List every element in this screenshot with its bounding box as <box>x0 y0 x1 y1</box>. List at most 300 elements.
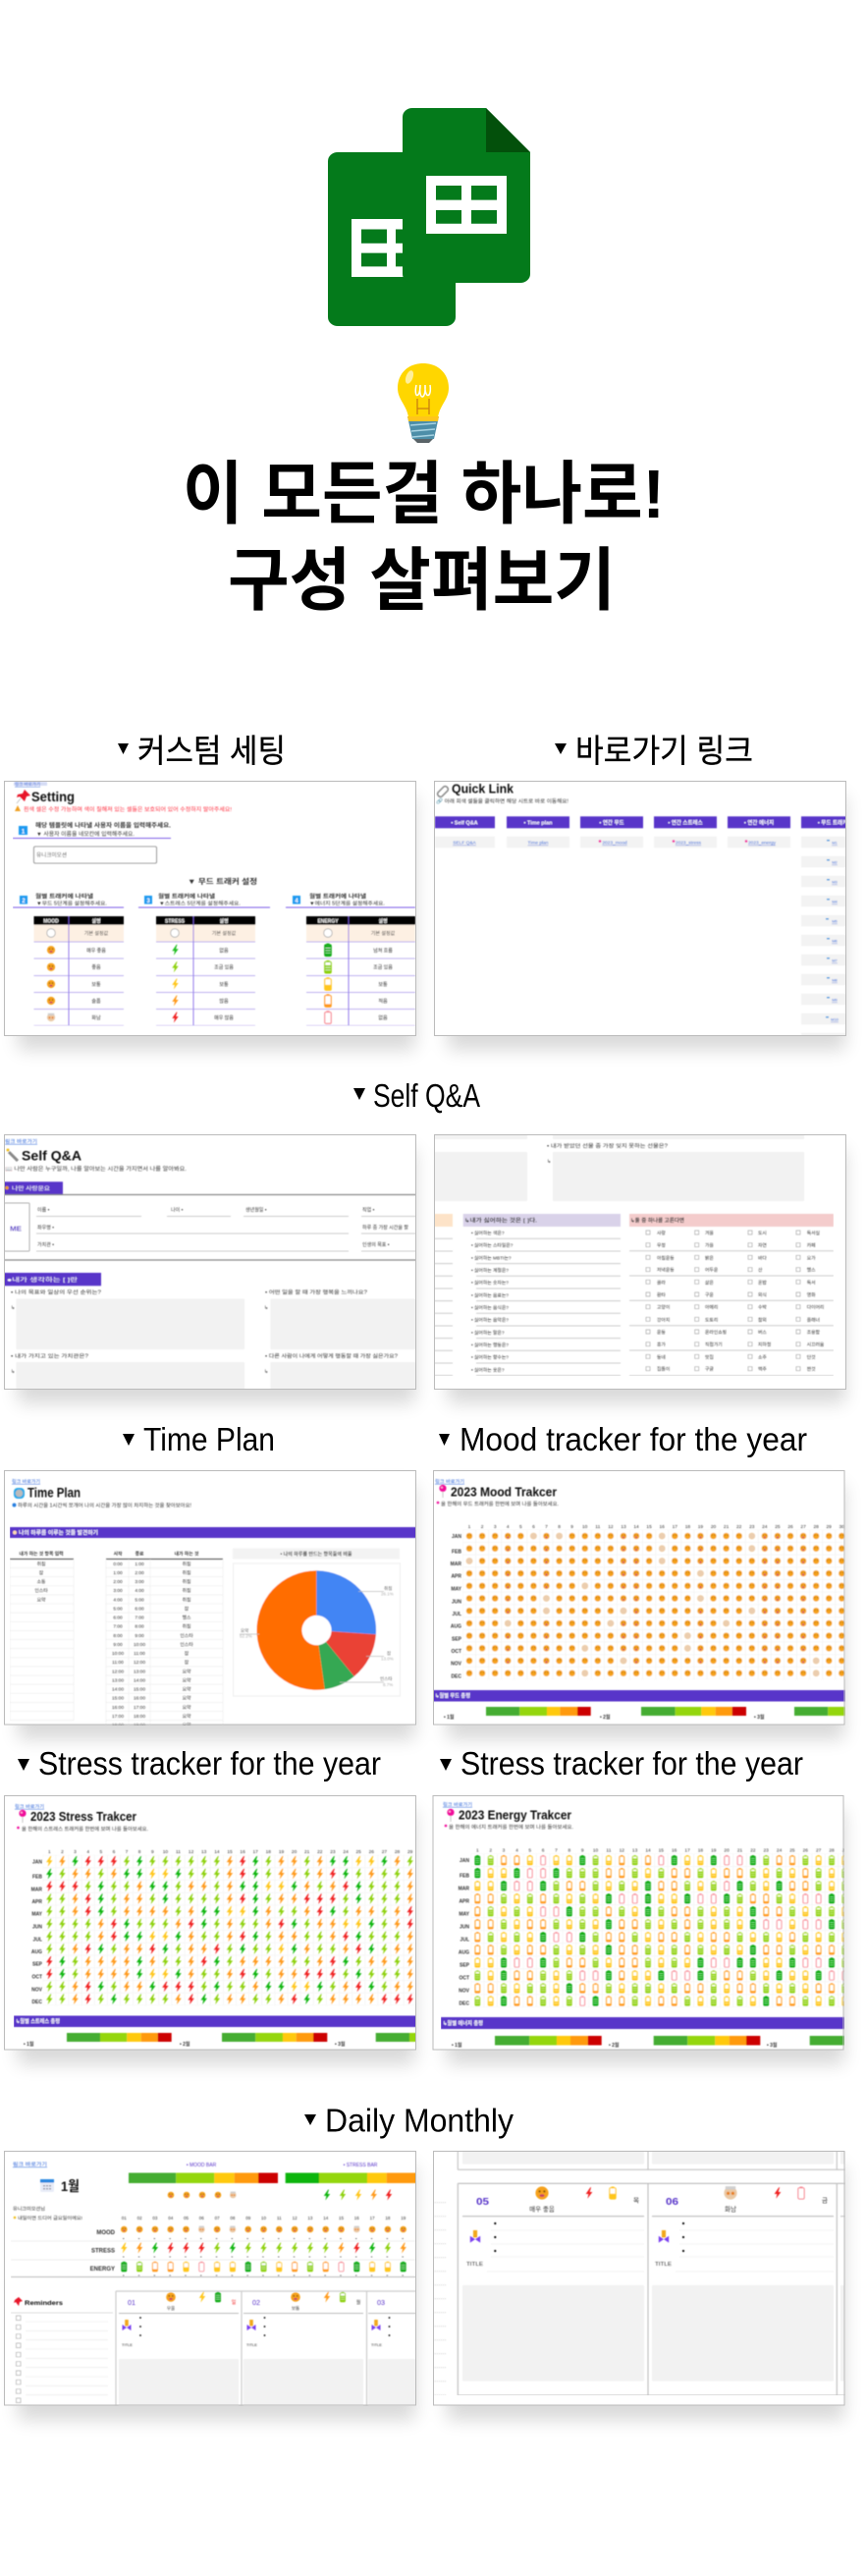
either-or table: 수박 <box>758 1304 767 1311</box>
day card 01: 우울 <box>167 2306 175 2312</box>
either-or table: 동네 <box>657 1353 666 1360</box>
day numbers: 9 <box>570 1524 573 1530</box>
monthly mini tracker: 15 <box>339 2216 344 2220</box>
item input table <box>10 1550 74 1721</box>
monthly mini tracker: 14 <box>323 2216 329 2220</box>
upper card remnants <box>433 2151 845 2395</box>
link cells: SELF Q&A <box>453 841 477 847</box>
link cells <box>435 837 850 1044</box>
day numbers: 14 <box>645 1848 651 1854</box>
panel: daily monthly sheet right <box>433 2151 845 2405</box>
panel: daily monthly sheet left <box>4 2151 417 2406</box>
schedule table: 13:00 <box>134 1669 145 1674</box>
either-or table: 밝은 <box>705 1254 714 1261</box>
link cells: M9 <box>832 998 839 1002</box>
energy tracker title: 2023 Energy Trakcer <box>459 1808 571 1822</box>
user name section <box>13 821 171 863</box>
day numbers: 18 <box>266 1849 271 1855</box>
either-or table: 독서실 <box>807 1230 820 1236</box>
profile fields: 이름 • <box>37 1207 50 1214</box>
monthly mood summary: • 3월 <box>754 1714 765 1721</box>
day numbers: 23 <box>330 1849 336 1855</box>
month title: 내일이면 드디어 금요일이에요! <box>18 2215 82 2221</box>
link cells: Time plan <box>528 841 549 847</box>
day numbers: 19 <box>279 1849 284 1855</box>
heading: self q&a: Self Q&A <box>373 1077 480 1114</box>
monthly stress summary <box>14 2015 416 2048</box>
section 3 stress: 월별 트래커에 나타낼 <box>158 892 215 900</box>
stress level table <box>156 916 255 1025</box>
month labels: MAR <box>31 1887 42 1892</box>
energy level table <box>306 916 415 1025</box>
either-or table: 구운 <box>705 1292 714 1298</box>
link cells: M1 <box>832 841 839 845</box>
section 2 mood <box>13 892 124 907</box>
item input table: 내가 하는 것 항목 입력 <box>19 1550 64 1558</box>
month labels: AUG <box>31 1949 42 1955</box>
day numbers: 23 <box>764 1848 769 1854</box>
month labels: APR <box>451 1574 461 1580</box>
section 2 mood: 2 <box>22 899 26 904</box>
day numbers: 24 <box>777 1848 783 1854</box>
month labels: OCT <box>451 1649 461 1655</box>
mood tracker title: 2023 Mood Trakcer <box>451 1485 557 1499</box>
either-or table: 도시 <box>758 1231 767 1236</box>
dislike list: • 싫어하는 향수는? <box>471 1354 509 1361</box>
user name section: 유니크미모션 <box>36 850 67 858</box>
either-or table: 사랑 <box>657 1230 666 1236</box>
month labels: MAY <box>459 1911 470 1917</box>
schedule table: 헬스 <box>183 1615 191 1620</box>
user name section: 1 <box>22 829 26 835</box>
month labels: JUL <box>453 1612 461 1617</box>
month labels: FEB <box>32 1875 42 1881</box>
section 3 stress: ▼스트레스 5단계를 설정해주세요. <box>159 900 241 907</box>
either-or table: 버스 <box>758 1329 767 1336</box>
day numbers: 29 <box>842 1848 847 1854</box>
self q&a title: 📖 나만 사람은 누구일까, 나를 알아보는 시간을 가지면서 나를 알아봐요. <box>5 1165 188 1173</box>
mood tracker setting heading: ▼ 무드 트래커 설정 <box>188 876 257 886</box>
month labels: APR <box>31 1899 42 1905</box>
panel: self q&a sheet left <box>4 1135 418 1392</box>
schedule table: 1:00 <box>135 1562 144 1567</box>
day numbers: 5 <box>99 1849 102 1855</box>
stress level table: 매우 많음 <box>214 1014 234 1021</box>
gift question: ↳ <box>547 1159 551 1165</box>
day card 06: 화남 <box>725 2204 736 2214</box>
month labels: MAR <box>451 1562 461 1567</box>
energy tracker title <box>443 1801 573 1831</box>
monthly mini tracker: 07 <box>215 2216 220 2220</box>
stress level table: 조금 있음 <box>214 964 234 971</box>
day numbers: 11 <box>176 1849 181 1855</box>
pie chart: 요약 <box>241 1627 248 1634</box>
panel: time plan sheet <box>4 1471 416 1728</box>
section 4 energy: 월별 트래커에 나타낼 <box>309 892 366 900</box>
schedule table: 10:00 <box>134 1642 145 1648</box>
either-or table: 우정 <box>657 1242 666 1249</box>
purple link buttons: • 연간 무드 <box>599 819 624 827</box>
monthly mini tracker: 06 <box>199 2216 204 2220</box>
day numbers: 13 <box>201 1849 207 1855</box>
monthly mini tracker: 17 <box>370 2216 375 2220</box>
day numbers: 12 <box>608 1524 614 1530</box>
time plan title: 하루의 시간을 1시간씩 쪼개어 나의 시간을 가장 많이 차지하는 것을 찾아보아요! <box>18 1501 191 1508</box>
day numbers: 25 <box>356 1849 361 1855</box>
day card 02: TITLE <box>246 2342 257 2347</box>
schedule table: 14:00 <box>134 1677 145 1683</box>
link cells: 2023_mood <box>602 841 627 847</box>
stress tracker title: 2023 Stress Trakcer <box>30 1810 136 1824</box>
month labels: FEB <box>460 1873 469 1879</box>
profile fields: 가치관 • <box>37 1241 54 1248</box>
mood level table: 화남 <box>91 1014 101 1021</box>
item input table: 취침 <box>37 1561 45 1567</box>
day numbers: 11 <box>595 1524 601 1530</box>
item input table: 소통 <box>37 1579 46 1585</box>
day card 02: 월 <box>356 2299 361 2306</box>
energy level table: 보통 <box>378 982 388 988</box>
mood level table: 보통 <box>91 982 101 988</box>
month title <box>13 2161 82 2221</box>
mood tracker title: 올 한해의 무드 트래커를 한번에 보며 나를 돌아보세요. <box>441 1501 559 1507</box>
profile fields: 직업 • <box>362 1207 375 1214</box>
monthly stress summary: ↳월별 스트레스 총평 <box>16 2017 60 2025</box>
schedule table: 요약 <box>183 1695 191 1702</box>
panel: setting sheet <box>4 781 416 1035</box>
setting title: 흰색 셀은 수정 가능하며 색이 칠해져 있는 셀들은 보호되어 있어 수정하지 말아주세요! <box>24 805 232 813</box>
title: 이 모든걸 하나로! <box>183 456 665 532</box>
monthly mood summary: ↳월별 무드 총평 <box>435 1691 470 1699</box>
schedule table: 취침 <box>183 1596 190 1603</box>
dislike list: • 싫어하는 MBTI는? <box>471 1254 512 1261</box>
day numbers: 8 <box>138 1849 141 1855</box>
either-or table: 자연 <box>758 1242 767 1249</box>
day numbers: 10 <box>593 1848 598 1854</box>
either-or table: 카페 <box>807 1242 816 1249</box>
icon: google sheets documents <box>328 108 530 326</box>
day numbers: 16 <box>660 1524 665 1530</box>
dislike list: • 싫어하는 색은? <box>471 1230 505 1236</box>
dislike list: ↳내가 싫어하는 것은 [ ]다. <box>464 1216 538 1224</box>
day numbers: 21 <box>737 1848 742 1854</box>
monthly mood summary <box>433 1690 845 1721</box>
section 2 mood: 월별 트래커에 나타낼 <box>35 892 93 900</box>
stress level table: 없음 <box>219 947 229 954</box>
monthly mini tracker: 18 <box>385 2216 391 2220</box>
schedule table: 7:00 <box>113 1624 123 1630</box>
either-or table: 맥주 <box>758 1366 767 1373</box>
day numbers: 29 <box>407 1849 413 1855</box>
dislike list: • 싫어하는 숫자는? <box>471 1280 509 1287</box>
day numbers: 27 <box>382 1849 387 1855</box>
monthly mini tracker: 04 <box>168 2216 174 2220</box>
day numbers <box>476 1848 847 1854</box>
day numbers: 19 <box>711 1848 717 1854</box>
profile fields <box>4 1203 416 1251</box>
time plan title: 링크 바로가기 <box>12 1478 40 1485</box>
monthly mini tracker: STRESS <box>91 2249 115 2255</box>
month labels: NOV <box>31 1987 43 1993</box>
schedule table: 요약 <box>183 1713 191 1720</box>
day numbers: 11 <box>606 1848 612 1854</box>
energy level table: 기본 설정값 <box>371 930 396 937</box>
day numbers: 25 <box>789 1848 795 1854</box>
item input table: 요약 <box>37 1596 46 1603</box>
either-or table: 강아지 <box>657 1316 670 1323</box>
month labels: DEC <box>459 2001 469 2006</box>
either-or table: 가을 <box>705 1242 714 1249</box>
day numbers: 5 <box>519 1524 522 1530</box>
day card 03: 03 <box>377 2300 385 2307</box>
schedule table: 15:00 <box>112 1696 124 1702</box>
stress level table: 많음 <box>219 998 229 1005</box>
either-or table: 구글 <box>705 1367 714 1373</box>
panel: self q&a sheet right <box>434 1134 846 1389</box>
question blocks: ↳ <box>11 1305 15 1311</box>
schedule table: 16:00 <box>112 1705 124 1711</box>
schedule table: 취침 <box>183 1578 190 1585</box>
question blocks: ↳ <box>264 1369 268 1375</box>
link cells: M5 <box>832 919 839 923</box>
heading: daily monthly: Daily Monthly <box>325 2103 514 2139</box>
quick link title: 🔗 아래 회색 셀들을 클릭하면 해당 시트로 바로 이동해요! <box>436 797 568 805</box>
day numbers: 8 <box>568 1848 570 1854</box>
quick link title: Quick Link <box>452 782 514 796</box>
dislike list <box>463 1214 621 1376</box>
either-or table: 고양이 <box>657 1304 670 1311</box>
day card 02 <box>244 2292 363 2406</box>
monthly mini tracker <box>11 2216 416 2276</box>
day numbers: 2 <box>489 1848 492 1854</box>
day numbers: 22 <box>736 1524 742 1530</box>
day card 03: TITLE <box>371 2342 382 2347</box>
month labels: MAR <box>459 1886 469 1891</box>
either-or table: 겨울 <box>705 1230 714 1236</box>
monthly mini tracker: 13 <box>307 2216 313 2220</box>
tab: profile <box>4 1181 416 1260</box>
day card 02: 02 <box>252 2300 260 2307</box>
stress level table: 설명 <box>219 917 229 925</box>
either-or table: 영화 <box>807 1291 816 1298</box>
day numbers: 19 <box>698 1524 703 1530</box>
dislike list: • 싫어하는 음료는? <box>471 1291 509 1298</box>
month title: 링크 바로가기 <box>13 2161 47 2168</box>
month labels: OCT <box>31 1975 42 1981</box>
day numbers: 20 <box>711 1524 716 1530</box>
user name section: ▼ 사용자 이름을 네모칸에 입력해주세요. <box>36 830 135 838</box>
day numbers: 2 <box>481 1524 484 1530</box>
energy grid <box>471 1854 851 2007</box>
purple link buttons: • Self Q&A <box>451 821 478 827</box>
monthly energy summary: • 1월 <box>452 2042 462 2049</box>
link cells: M4 <box>832 900 839 904</box>
day numbers: 1 <box>48 1849 51 1855</box>
stress grid <box>43 1855 417 2005</box>
schedule table: 17:00 <box>112 1714 124 1720</box>
day numbers: 20 <box>292 1849 298 1855</box>
monthly mini tracker: 03 <box>152 2216 158 2220</box>
energy tracker title: 링크 바로가기 <box>443 1801 472 1808</box>
mood grid <box>462 1530 848 1679</box>
mood and stress bars <box>129 2163 416 2200</box>
mood and stress bars: • MOOD BAR <box>187 2163 217 2168</box>
pie chart: 8.7% <box>383 1682 393 1687</box>
schedule table: 취침 <box>183 1561 190 1567</box>
schedule table: 4:00 <box>135 1588 144 1594</box>
either-or table: ↳둘 중 하나를 고른다면 <box>630 1216 684 1224</box>
day card 06: 06 <box>666 2197 679 2208</box>
link cells: M2 <box>832 860 839 864</box>
day card 05: 05 <box>476 2197 490 2208</box>
title <box>183 456 665 619</box>
monthly energy summary: ↳월별 에너지 총평 <box>443 2019 483 2027</box>
schedule table: 13:00 <box>112 1677 124 1683</box>
day numbers: 8 <box>558 1524 561 1530</box>
monthly mini tracker: 11 <box>277 2216 282 2220</box>
profile fields: 생년월일 • <box>245 1207 267 1214</box>
purple section bar <box>10 1527 416 1538</box>
setting title: Setting <box>31 789 75 804</box>
schedule table: 14:00 <box>112 1687 124 1693</box>
link cells: 2023_stress <box>676 841 702 847</box>
schedule table: 6:00 <box>113 1615 123 1620</box>
mood and stress bars: • STRESS BAR <box>344 2163 378 2168</box>
day card 03 <box>368 2300 417 2406</box>
month labels <box>31 1859 43 2005</box>
either-or table: 소주 <box>758 1354 767 1360</box>
month labels <box>451 1534 462 1679</box>
schedule table: 12:00 <box>112 1669 124 1674</box>
day numbers: 13 <box>621 1524 626 1530</box>
month labels: JUN <box>460 1924 469 1930</box>
user name section: 해당 템플릿에 나타낼 사용자 이름을 입력해주세요. <box>35 821 171 829</box>
pie chart: 인스타 <box>380 1675 393 1682</box>
monthly energy summary: • 2월 <box>609 2042 620 2049</box>
day card 05: 목 <box>633 2196 639 2204</box>
either-or table: 바다 <box>758 1254 767 1261</box>
day numbers: 25 <box>775 1524 781 1530</box>
schedule table: 18:00 <box>134 1714 145 1720</box>
schedule table: 취침 <box>183 1623 190 1630</box>
mood level table: 좋음 <box>91 965 101 971</box>
heading: stress tracker (energy sheet): Stress tracker for the year <box>460 1745 803 1781</box>
purple link buttons: • 연간 에너지 <box>744 819 774 827</box>
schedule table: 5:00 <box>135 1597 144 1603</box>
stress tracker title <box>15 1803 148 1833</box>
self q&a title <box>5 1138 188 1173</box>
day numbers: 15 <box>646 1524 652 1530</box>
either-or table: 플래너 <box>807 1316 820 1323</box>
pie chart: • 나의 하루를 만드는 항목들의 비율 <box>280 1551 352 1558</box>
pie chart: 13.0% <box>381 1656 394 1662</box>
schedule table: 19:00 <box>134 1723 145 1728</box>
monthly energy summary <box>441 2017 845 2049</box>
section 3 stress <box>138 892 270 907</box>
day numbers: 26 <box>803 1848 808 1854</box>
either-or table: 도토리 <box>705 1316 718 1323</box>
energy level table: 적음 <box>378 998 388 1005</box>
heading: quick link: 바로가기 링크 <box>575 733 753 769</box>
question blocks: • 다른 사람이 나에게 어떻게 행동할 때 가장 싫은가요? <box>265 1351 398 1359</box>
dislike list: • 싫어하는 옷은? <box>471 1366 505 1373</box>
item input table: 인스타 <box>34 1587 48 1594</box>
day numbers: 21 <box>304 1849 310 1855</box>
either-or table: 저녁운동 <box>657 1267 675 1274</box>
month labels: DEC <box>451 1673 461 1679</box>
question blocks: ↳ <box>264 1305 268 1311</box>
schedule table: 10:00 <box>112 1651 124 1657</box>
setting title <box>14 781 232 813</box>
reminders list: Reminders <box>25 2300 63 2307</box>
either-or table: 외식 <box>758 1291 767 1298</box>
schedule table: 0:00 <box>113 1562 123 1567</box>
day numbers: 16 <box>240 1849 245 1855</box>
energy level table: ENERGY <box>317 919 339 925</box>
monthly mood summary: • 1월 <box>444 1714 455 1721</box>
either-or table: 요가 <box>807 1254 816 1261</box>
stress level table: 보통 <box>219 982 229 988</box>
day numbers: 28 <box>395 1849 400 1855</box>
dislike list: • 싫어하는 음식은? <box>471 1304 509 1311</box>
day numbers: 18 <box>698 1848 703 1854</box>
month title: 1월 <box>61 2178 80 2194</box>
section 2 mood: ▼무드 5단계를 설정해주세요. <box>36 900 107 907</box>
day numbers: 17 <box>673 1524 677 1530</box>
day card 06: TITLE <box>655 2262 672 2268</box>
tab: thinking: ●내가 생각하는 [ ]란 <box>7 1276 78 1284</box>
mood level table <box>33 916 124 1025</box>
day numbers: 6 <box>113 1849 116 1855</box>
either-or table: 환타 <box>657 1291 666 1298</box>
schedule table: 잠 <box>185 1659 189 1666</box>
day numbers: 16 <box>672 1848 677 1854</box>
day card 02: 보통 <box>292 2306 299 2311</box>
either-or table <box>629 1214 834 1376</box>
monthly mini tracker: 12 <box>293 2216 298 2220</box>
setting title: 링크 바로가기 <box>15 781 40 788</box>
schedule table: 요약 <box>183 1722 191 1728</box>
link cells: M7 <box>832 959 839 962</box>
dislike list: • 싫어하는 스타일은? <box>471 1242 514 1249</box>
monthly mini tracker: 02 <box>137 2216 142 2220</box>
month labels: JAN <box>452 1534 461 1540</box>
schedule table: 잠 <box>185 1605 189 1612</box>
schedule table: 11:00 <box>134 1651 145 1657</box>
monthly stress summary: • 1월 <box>24 2041 34 2048</box>
schedule table: 5:00 <box>113 1606 123 1612</box>
day numbers: 30 <box>839 1524 844 1530</box>
monthly mini tracker: 10 <box>261 2216 266 2220</box>
day numbers: 22 <box>317 1849 323 1855</box>
month labels: JUL <box>460 1937 469 1943</box>
day numbers: 5 <box>528 1848 531 1854</box>
schedule table: 9:00 <box>113 1642 123 1648</box>
day numbers: 17 <box>684 1848 690 1854</box>
day numbers: 28 <box>814 1524 819 1530</box>
peach list stub <box>434 1214 453 1376</box>
either-or table: 삶은 <box>705 1279 714 1286</box>
schedule table: 4:00 <box>113 1597 123 1603</box>
time plan title <box>12 1478 191 1508</box>
section 4 energy: ▼에너지 5단계를 설정해주세요. <box>309 900 385 907</box>
schedule table: 12:00 <box>134 1660 145 1666</box>
day numbers: 10 <box>582 1524 588 1530</box>
schedule table: 종료 <box>135 1552 144 1558</box>
month labels: APR <box>459 1898 469 1904</box>
day numbers: 7 <box>555 1848 558 1854</box>
day numbers: 3 <box>503 1848 506 1854</box>
